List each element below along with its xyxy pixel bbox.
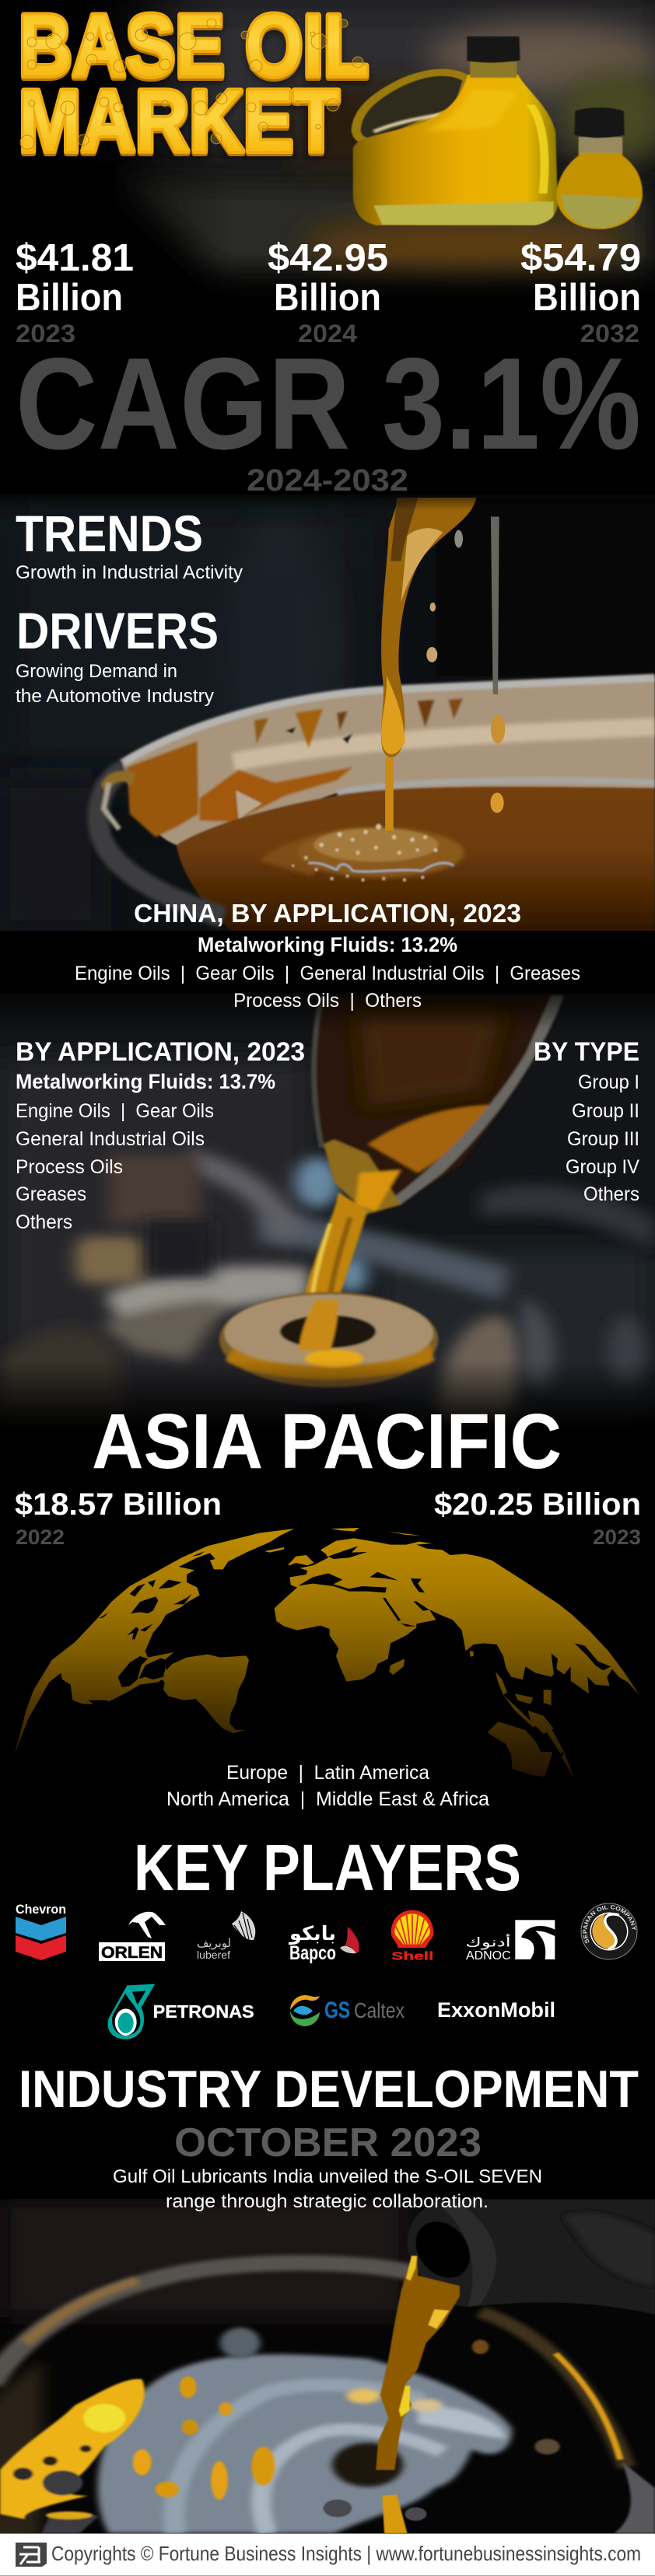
Eurasia, Africa and Australia bbox=[275, 1528, 639, 1779]
logo: ADNOC: ADNOC bbox=[466, 1949, 511, 1963]
by application list: Process Oils bbox=[16, 1156, 123, 1178]
splash bbox=[298, 828, 464, 877]
title: MARKET bbox=[19, 72, 339, 170]
by type list: Group I bbox=[578, 1071, 639, 1093]
logo: Bapco: بابكو bbox=[288, 1922, 336, 1945]
by application list: General Industrial Oils bbox=[16, 1128, 205, 1150]
stat: 2022: $18.57 Billion bbox=[15, 1487, 222, 1522]
stat: 2024 value: 2024 bbox=[298, 320, 357, 348]
by application list: Metalworking Fluids: 13.7% bbox=[16, 1070, 275, 1093]
bucket bbox=[98, 678, 655, 933]
bucket handle rim bbox=[98, 770, 223, 918]
development description bbox=[113, 2166, 542, 2212]
photo: oil pouring into engine swirl bbox=[0, 2199, 655, 2540]
China by application: CHINA, BY APPLICATION, 2023 bbox=[134, 899, 521, 928]
by type list: Others bbox=[583, 1183, 639, 1205]
by type list: Group IV bbox=[566, 1156, 639, 1178]
logo: Shell bbox=[391, 1910, 433, 1963]
logo: Luberef: لوبريف bbox=[197, 1936, 231, 1950]
stat: 2032 value bbox=[520, 237, 641, 348]
trends block: TRENDS bbox=[16, 505, 203, 562]
stat: 2022: 2022 bbox=[16, 1526, 65, 1549]
by type list: BY TYPE bbox=[534, 1037, 639, 1067]
other regions: North America | Middle East & Africa bbox=[166, 1788, 489, 1810]
logo: ADNOC: أدنوك bbox=[465, 1933, 511, 1949]
by application list: Greases bbox=[16, 1183, 86, 1205]
by type list: Group III bbox=[567, 1128, 639, 1150]
logo: Luberef: luberef bbox=[197, 1949, 230, 1961]
stat: 2023 value: Billion bbox=[16, 277, 123, 319]
heading: Asia Pacific: ASIA PACIFIC bbox=[92, 1398, 562, 1485]
drivers block bbox=[16, 602, 219, 707]
logo: Chevron: Chevron bbox=[16, 1902, 66, 1917]
photo: oil poured into engine bbox=[0, 994, 655, 1423]
logo: Orlen: ORLEN bbox=[101, 1944, 163, 1962]
stat: 2023 value: $41.81 bbox=[16, 237, 134, 279]
China by application: Metalworking Fluids: 13.2% bbox=[198, 933, 457, 956]
stat: 2024 value: Billion bbox=[274, 277, 381, 319]
logo: Petronas: PETRONAS bbox=[153, 2001, 254, 2022]
stat: 2032 value: 2032 bbox=[580, 320, 639, 348]
logo: Petronas bbox=[108, 1984, 254, 2039]
yellow oil patch bbox=[0, 2340, 560, 2533]
logo: Shell: Shell bbox=[391, 1951, 433, 1963]
by application list bbox=[16, 1037, 305, 1233]
stream bbox=[376, 2256, 460, 2470]
footer logo bbox=[16, 2543, 47, 2567]
logo: Luberef bbox=[197, 1911, 255, 1961]
blurred engine parts bbox=[0, 1056, 317, 1401]
other regions bbox=[166, 1762, 489, 1810]
photo: oil jug and bottle bbox=[124, 0, 655, 289]
stat: 2023 value: 2023 bbox=[16, 320, 75, 348]
logo: Chevron bbox=[16, 1902, 66, 1960]
heading: Key Players: KEY PLAYERS bbox=[134, 1831, 521, 1904]
swirl bbox=[97, 2354, 512, 2533]
logo: ADNOC bbox=[465, 1920, 555, 1963]
footer bar bbox=[0, 2533, 655, 2576]
logo: Orlen bbox=[99, 1912, 166, 1962]
photo: oil pouring into bucket bbox=[0, 495, 655, 933]
logo: Bapco: Bapco bbox=[289, 1942, 336, 1964]
stat: 2023 bbox=[434, 1487, 641, 1549]
title bbox=[19, 0, 369, 170]
logo: Sepahan Oil Company: SEPAHAN OIL COMPANY bbox=[583, 1905, 636, 1944]
stat: 2023 value bbox=[16, 237, 134, 348]
pour stream bbox=[381, 498, 505, 830]
jug and small bottle bbox=[353, 37, 643, 229]
logo: Bapco bbox=[288, 1922, 359, 1964]
development description: range through strategic collaboration. bbox=[166, 2191, 489, 2212]
stat: 2023: $20.25 Billion bbox=[434, 1487, 641, 1522]
stat: 2024 value bbox=[268, 237, 388, 348]
stat: 2024 value: $42.95 bbox=[268, 237, 388, 279]
by application list: BY APPLICATION, 2023 bbox=[16, 1037, 305, 1067]
stat: 2032 value: $54.79 bbox=[520, 237, 641, 279]
logo: GS Caltex bbox=[290, 1995, 405, 2026]
logo: ExxonMobil: ExxonMobil bbox=[437, 1998, 555, 2022]
development date: OCTOBER 2023 bbox=[174, 2120, 482, 2165]
logo: GS Caltex: Caltex bbox=[354, 1998, 405, 2022]
stat: 2023: 2023 bbox=[593, 1526, 641, 1549]
trends block bbox=[16, 505, 243, 583]
bottle, stream and filler cap bbox=[219, 995, 564, 1404]
stat: 2032 value: Billion bbox=[533, 277, 641, 319]
stat: 2022 bbox=[15, 1487, 222, 1549]
by type list bbox=[534, 1037, 639, 1205]
China by application: Engine Oils | Gear Oils | General Industrial Oils | Greases bbox=[75, 963, 580, 984]
trends block: Growth in Industrial Activity bbox=[16, 562, 243, 583]
development description: Gulf Oil Lubricants India unveiled the S-OIL SEVEN bbox=[113, 2166, 542, 2187]
CAGR period: 2024-2032 bbox=[247, 463, 408, 498]
China by application bbox=[75, 899, 580, 1012]
title bubbles bbox=[20, 19, 363, 149]
other regions: Europe | Latin America bbox=[226, 1762, 429, 1784]
drivers block: Growing Demand in bbox=[16, 661, 177, 682]
oil surface bbox=[177, 786, 655, 933]
logo: GS Caltex: GS bbox=[324, 1998, 350, 2023]
by type list: Group II bbox=[572, 1100, 639, 1122]
China by application: Process Oils | Others bbox=[233, 990, 422, 1012]
globe map bbox=[14, 1528, 639, 1779]
by application list: Others bbox=[16, 1211, 72, 1233]
drivers block: DRIVERS bbox=[16, 602, 219, 659]
drivers block: the Automotive Industry bbox=[16, 686, 214, 707]
bottle bbox=[324, 2199, 655, 2533]
by application list: Engine Oils | Gear Oils bbox=[16, 1100, 214, 1122]
Americas and Greenland bbox=[14, 1529, 294, 1755]
